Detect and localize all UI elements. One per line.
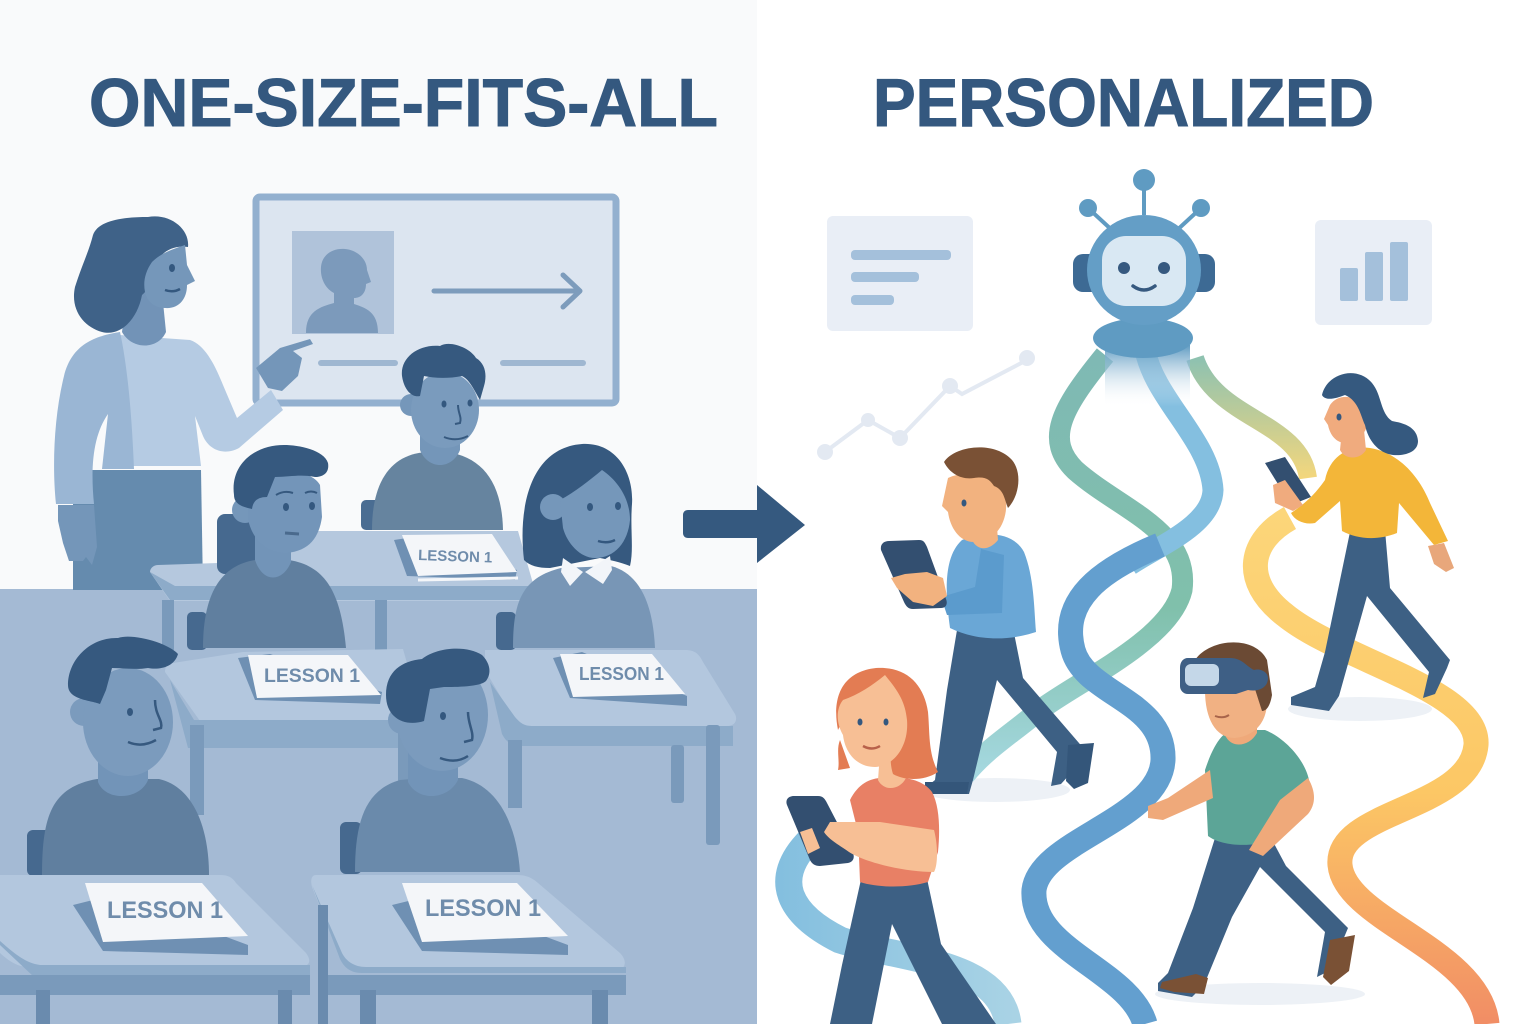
book: front left: [73, 883, 248, 955]
data card: text: [827, 216, 973, 331]
book: front left: LESSON 1: [107, 897, 223, 924]
path: light blue branch: [1130, 350, 1213, 565]
back desk: [150, 531, 538, 650]
line chart: [817, 350, 1035, 460]
robot: [1073, 169, 1215, 407]
teacher: [54, 216, 313, 590]
student: front right: [340, 649, 520, 874]
book: middle right: LESSON 1: [579, 664, 664, 684]
left panel background: [0, 0, 757, 590]
path: orange: [1255, 518, 1487, 1024]
middle desks: [165, 649, 736, 845]
book: back: [394, 534, 518, 580]
path: green: [965, 355, 1183, 775]
book: middle left: LESSON 1: [264, 666, 360, 687]
student: middle left: [187, 445, 346, 650]
path: main blue: [1034, 545, 1163, 1024]
book: front right: LESSON 1: [425, 895, 541, 922]
book: back: LESSON 1: [418, 547, 493, 567]
student: middle right: [496, 444, 655, 650]
book: middle left: [238, 654, 382, 704]
transition arrow: [683, 485, 805, 563]
student: back center: [361, 344, 503, 530]
book: middle right: [553, 652, 687, 706]
book: front right: [392, 883, 568, 955]
path: yellow upper: [1195, 358, 1308, 478]
front desks: [0, 875, 626, 1024]
student: front left: [27, 637, 209, 876]
person: girl in coral: [786, 668, 996, 1024]
data card: bar chart: [1315, 220, 1432, 325]
shadows: [920, 697, 1432, 1005]
title: personalized: PERSONALIZED: [873, 65, 1374, 141]
person: girl in yellow: [1265, 373, 1454, 711]
path: light blue lower: [789, 840, 1008, 1024]
classroom floor: [0, 589, 757, 1024]
projection screen: [256, 197, 616, 403]
person: boy with tablet: [881, 447, 1094, 794]
title: one-size-fits-all: ONE-SIZE-FITS-ALL: [89, 65, 718, 141]
person: child with VR headset: [1148, 642, 1355, 997]
